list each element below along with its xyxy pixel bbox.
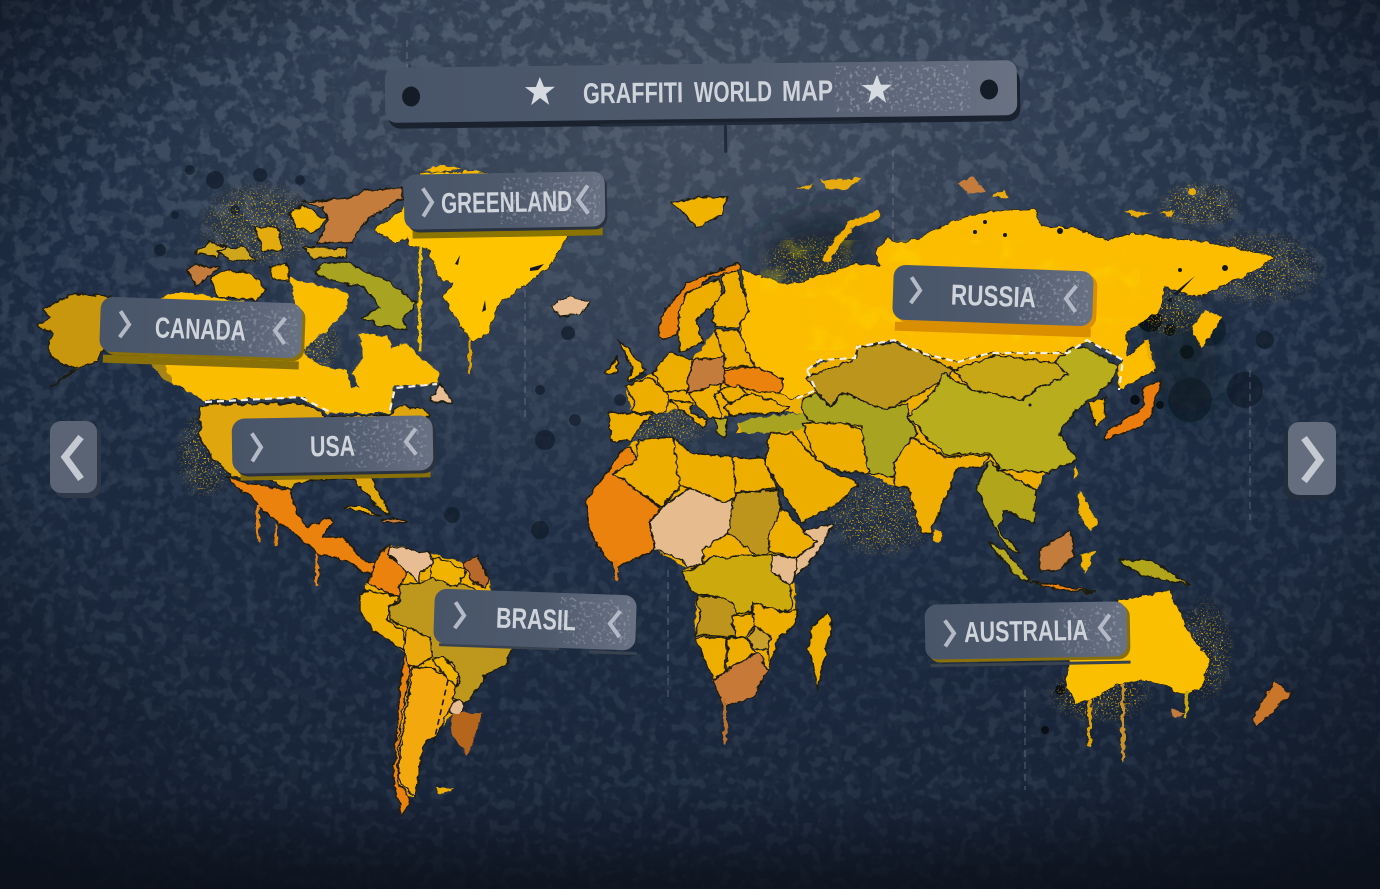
zambia [732,613,755,637]
paraguay [432,657,458,687]
label: usa [232,415,437,481]
canada [147,277,440,413]
namibia [695,637,727,678]
stars [525,73,892,107]
japan [1105,380,1162,440]
poland [687,357,724,393]
title: WORLD [694,76,772,109]
argentina [398,667,457,797]
paint drips [258,247,1186,760]
kenya [772,555,797,585]
label: australia [925,601,1131,666]
label: usa: USA [310,431,355,463]
country dashes [432,488,777,750]
ellesmere island [302,188,403,243]
libya [673,437,735,502]
asia base [738,347,1119,533]
africa [587,437,832,707]
novaya zemlya [826,214,878,262]
arctic islands [187,205,347,300]
greenland [373,172,600,342]
central asia [802,393,917,477]
spray paint speckle [175,179,1330,725]
label: brasil [433,588,639,654]
sakhalin [1146,340,1153,368]
svalbard [671,197,726,227]
kazakhstan [807,343,954,410]
label: greenland: GREENLAND [441,186,572,220]
australia [1065,590,1210,705]
ethiopia [768,507,817,557]
label: australia: AUSTRALIA [964,615,1088,649]
spain [609,412,653,442]
arabia [765,433,859,523]
europe base [625,310,802,418]
banner speckle [835,65,970,112]
sweden [678,278,722,352]
sumatra and java [988,542,1095,592]
title: MAP [782,75,833,108]
philippines and taiwan [1073,465,1098,532]
south africa [713,652,768,707]
label: brasil: BRASIL [495,603,577,637]
south america base [360,545,513,817]
label: russia [892,265,1098,338]
norway [657,263,742,340]
world map [37,165,1292,817]
central african republic [702,533,758,562]
botswana [727,638,757,670]
french guiana [463,555,487,587]
mongolia [954,355,1068,400]
border dashes [205,340,1123,412]
zimbabwe [747,627,770,650]
kamchatka [1192,310,1222,348]
somalia [793,525,832,580]
mexico and central america [227,477,383,575]
greenland top fragments [425,165,482,176]
title [583,75,833,110]
right navigation arrow [1284,422,1336,500]
sudan [728,490,782,557]
india [894,437,990,533]
great britain [618,340,646,383]
venezuela [388,547,433,583]
title banner [385,60,1021,157]
label: canada [99,297,306,370]
guyana and suriname [430,558,470,587]
niger and nigeria [650,488,735,568]
title: GRAFFITI [583,77,683,110]
label: greenland [404,171,608,239]
eurasia [605,177,1275,592]
west africa [587,447,660,567]
egypt [733,457,777,493]
korea [1089,397,1105,427]
russia [740,210,1275,400]
tasmania [1170,710,1185,718]
bolivia [403,627,433,667]
finland [712,270,749,327]
south america [360,545,513,817]
yellow mottling [760,240,1140,350]
sulawesi [1080,550,1095,575]
new guinea [1118,560,1190,585]
caribbean [343,505,407,523]
newfoundland [430,383,453,403]
banner holes [402,79,998,107]
congo [682,555,793,613]
chile [393,653,410,817]
romania [724,393,788,415]
iran [802,423,869,472]
ukraine [724,367,784,393]
madagascar [808,612,832,690]
label: russia: RUSSIA [950,280,1037,314]
sri lanka [934,530,940,542]
left navigation arrow [50,421,101,498]
ireland [605,357,618,373]
north america [37,188,453,575]
balkans [690,383,722,418]
hungary [717,385,749,403]
baltics and belarus [715,330,754,367]
angola [695,597,738,637]
france [625,377,669,413]
southeast asia [976,460,1036,553]
label: canada: CANADA [154,312,246,348]
ecuador and peru [360,590,405,653]
falkland islands [435,788,453,795]
africa base [587,437,832,707]
tanzania and mozambique [753,603,797,667]
land cracks [455,220,1228,406]
colombia [368,545,408,597]
borneo [1040,530,1075,572]
baffin island [315,263,417,330]
iceland [550,296,590,316]
british columbia coast [146,358,175,385]
turkey [738,413,820,433]
new zealand [1254,680,1292,727]
algeria [613,437,680,507]
germany [653,352,692,392]
arctic fragments [795,177,1196,218]
alaska [37,293,110,388]
uruguay [450,700,464,714]
greece [715,418,729,437]
southern brazil speckle [450,713,483,757]
brazil [390,577,513,707]
usa [200,403,430,515]
china [908,347,1119,473]
italy [669,400,708,428]
